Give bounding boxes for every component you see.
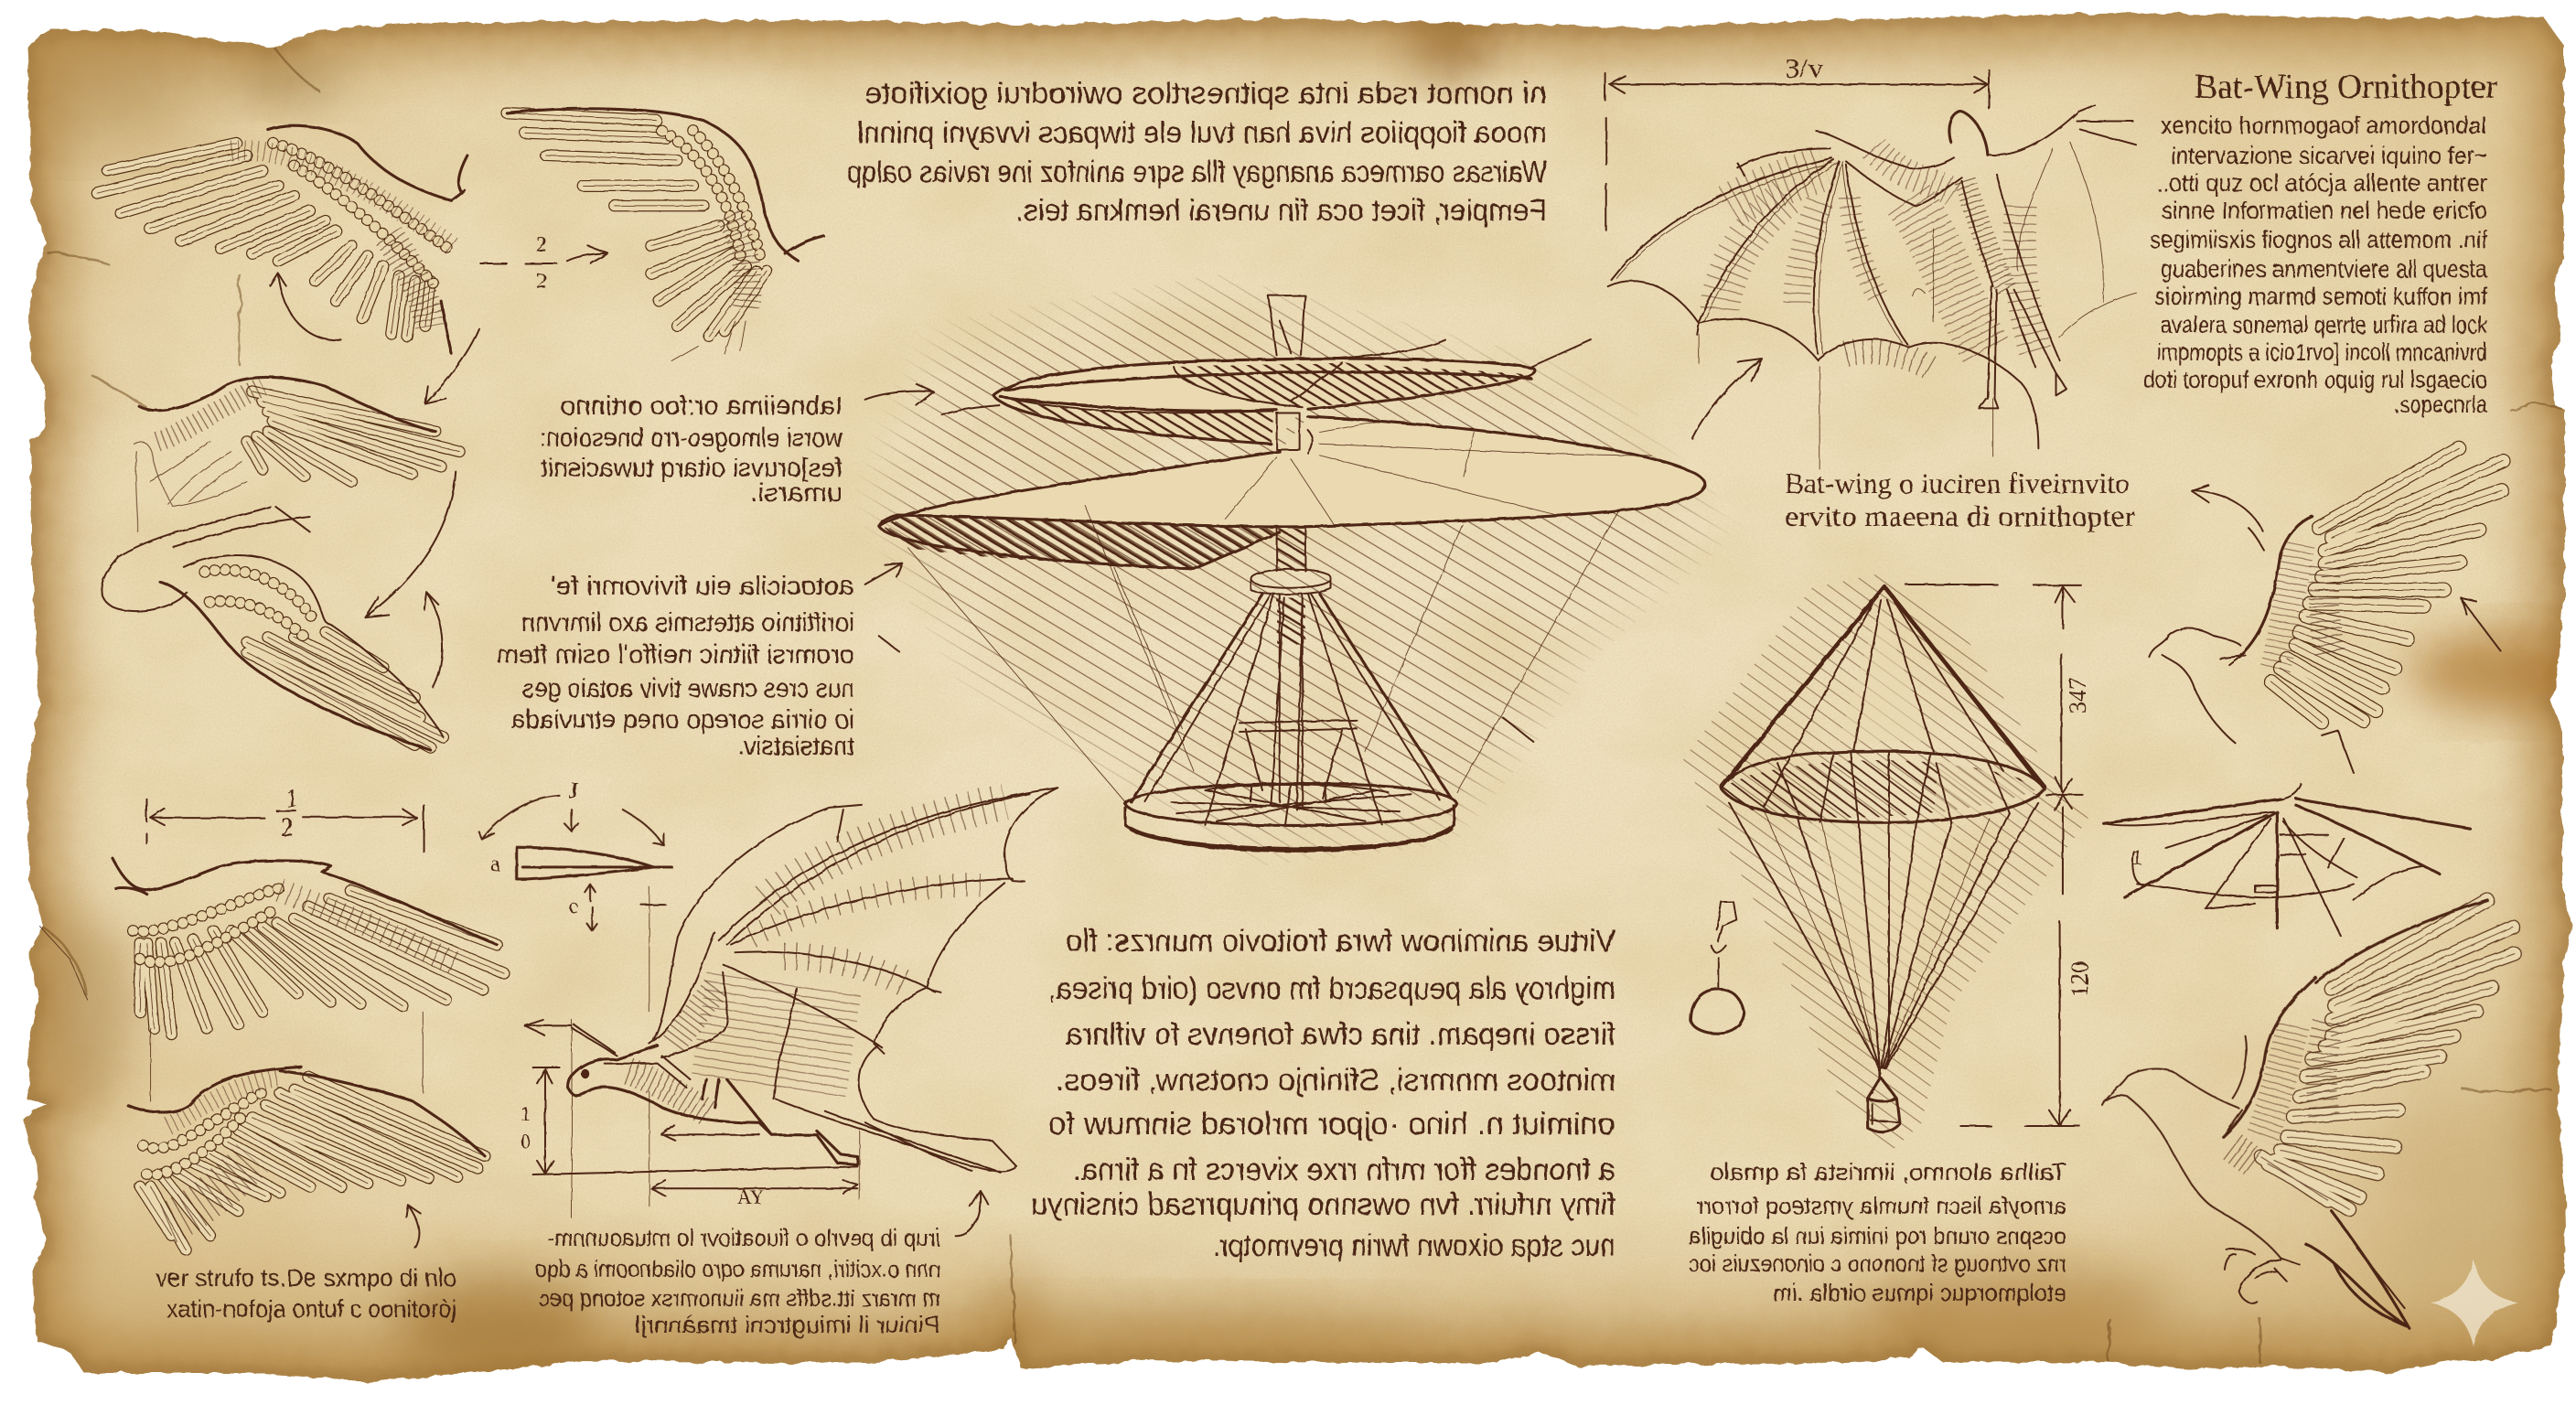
wing study 5: [112, 858, 504, 1035]
text block: ornithopter notes: doti toropuf exronh oquig rul lsgaecio: [2143, 366, 2487, 393]
top bat wing drawing: [1608, 105, 2137, 469]
aerial screw helicopter: [879, 295, 1705, 851]
airfoil section diagram: [478, 796, 671, 931]
text block: ornithopter notes: sioirming marmd semoti kuffon imf: [2154, 283, 2487, 310]
text block: bat notes: nnn o.xcitiri, naruma oqro oliadnoomi a dqo: [535, 1255, 940, 1282]
dimension labels: 347: [2065, 678, 2091, 713]
wing study 6: [128, 1067, 485, 1249]
pendant ring detail: [1690, 902, 1744, 1034]
text block: lower center mirrored notes: fimy nrfuirr. fvn owsnno prinuprrsad cinsinyu: [1031, 1187, 1615, 1222]
text block: ornithopter notes: segimiisxis fiognos all attemom .nif: [2150, 226, 2487, 253]
text block: parachute notes: ocspns orund roq inimia iun la obiugila: [1689, 1222, 2066, 1249]
text block: top center mirrored notes: [847, 76, 1547, 227]
dimension labels: a: [490, 853, 500, 876]
text block: ornithopter notes: [2143, 112, 2488, 418]
wing shading: [1731, 167, 1825, 206]
circular base: [1125, 784, 1456, 851]
span dimension and wing arrows: [40, 799, 424, 1248]
text block: mechanism notes: aotocicila eiu fivivomri fe': [551, 572, 854, 601]
text block: ornithopter notes: guaberines anmentviere all questa: [2161, 255, 2488, 283]
fuselage and arm: [649, 933, 727, 1057]
conical parachute: [1722, 586, 2045, 1132]
text block: ornithopter notes: impmopts a icio1rvo] incoll mncanivrd: [2157, 338, 2487, 366]
dimension labels: 2: [536, 233, 547, 257]
dimension labels: 2: [281, 814, 294, 842]
side view dimensions: [525, 887, 988, 1236]
span dimension top: [1605, 70, 1989, 231]
text block: bat notes: m mrarz itt.sdffs ma iiunomrsx sotonq pec: [539, 1284, 940, 1312]
wing study 1: [97, 125, 467, 354]
title: Bat-Wing Ornithopter: Bat-Wing Ornithopter: [2195, 68, 2497, 106]
talons: [2225, 1249, 2287, 1303]
text block: bat notes: Piniur il imiugtrcni tmaànnrjl: [635, 1311, 940, 1338]
dimension labels: 0: [521, 1130, 531, 1153]
text block: mechanism notes: ioriftitnio attetsmis axo limrvnn: [521, 608, 854, 638]
thin guide cords: [907, 506, 1620, 802]
tail: [776, 1099, 1017, 1173]
text block: mechanism notes: nus cres cnawe tiviv aotaio ges: [522, 674, 854, 703]
text block: lower center mirrored notes: Virtue animinow fwra froitovio munrzs: flo: [1066, 924, 1615, 959]
wing fingers: [719, 788, 1057, 1047]
wing study 3: [134, 377, 459, 531]
text block: parachute notes: [1689, 1158, 2066, 1306]
text block: ornithopter notes: xencito hornmogaof amordondaI: [2161, 112, 2487, 139]
text block: lower center mirrored notes: mintoos mnmrsi, Sfininjo cnotsnw, fireos.: [1056, 1063, 1615, 1098]
caption: bat-wing ornithopter: ervito maeena di ornithopter: [1785, 499, 2135, 532]
parachute height dimensions: [1905, 585, 2083, 1126]
lower right dove: [2102, 900, 2515, 1328]
caption: bat-wing ornithopter: Bat-wing o iuciren fiveirnvito: [1785, 467, 2130, 499]
text block: parachute notes: arnoyfa liscn fnumla ymsteoq forrorr: [1696, 1192, 2066, 1219]
text block: lower center mirrored notes: [1031, 924, 1615, 1263]
wing bones: [1611, 158, 1907, 354]
text block: mechanism notes: tnatsiatsiv.: [738, 732, 854, 761]
dimension labels: 120: [2066, 961, 2093, 997]
text block: ornithopter notes: intervazione sicarvei iquino fer~: [2171, 142, 2487, 169]
caption: bat-wing ornithopter: [1785, 467, 2135, 532]
watermark sparkle: [2431, 1260, 2517, 1346]
central mast and collar: [1268, 295, 1305, 355]
dimension labels: 1: [521, 1102, 531, 1125]
arrows pointing at the screw: [865, 384, 1534, 742]
arrow to bat: [1692, 359, 1762, 439]
upper screw sail: [993, 359, 1535, 444]
text block: top center mirrored notes: ni nomot rsda inta spitnesrtlos owirodrui goixifiote: [864, 76, 1547, 110]
membrane hatching: [767, 984, 784, 1091]
dove arrows: [2192, 486, 2500, 650]
text block: lower center mirrored notes: a fnondes ffor mrfn rrxe xivercs fn a firna.: [1073, 1153, 1615, 1187]
text block: screw notes: [540, 391, 843, 508]
dimension labels: c: [569, 895, 578, 917]
dimension labels: 1: [2131, 846, 2142, 870]
text block: ornithopter notes: sinne Informatien nel hede ericfo: [2162, 197, 2487, 224]
head: [568, 1046, 759, 1123]
conical frame: [1131, 594, 1451, 802]
text block: lower center mirrored notes: mighroy ala peupsacrd fm onvso (oird prisea,: [1048, 971, 1615, 1006]
text block: ornithopter notes: ..otti quz ocl atócja allente antrer: [2156, 169, 2487, 197]
text block: mechanism notes: oromrsi fiitnic neiffo'l osim ftem: [497, 640, 854, 670]
lower screw sail: [879, 417, 1705, 569]
text block: parachute notes: etolqmorquc iqmus oirdla .im: [1773, 1279, 2066, 1306]
text block: wing notes: ver strufo ts.De sxmpo di nlo: [156, 1264, 456, 1292]
legs: [703, 1079, 857, 1164]
upper right dove: [2149, 448, 2504, 773]
wing study 4: [102, 507, 444, 750]
text block: bat notes: irup ib pevrlo o fiuoatiovr lo mtuaounnm-: [547, 1224, 940, 1251]
hatching fields behind machines: [851, 274, 2088, 1152]
cycle arrows between wings: [271, 273, 478, 687]
text block: screw notes: worsi elmogeo-rro bnesoion:: [540, 424, 843, 453]
text block: parachute notes: rnz ovtnoug sf tnonono c oinonezuis ioc: [1689, 1249, 2066, 1277]
body and legs: [1949, 112, 1988, 155]
text block: mechanism notes: io oirria soreqo oneq etruviada: [510, 705, 854, 735]
small wing frame: [2104, 784, 2470, 937]
text block: top center mirrored notes: Fempier, ficet oca fin unerai hemkna teis.: [1015, 193, 1547, 227]
dimension labels: 3/v: [1785, 55, 1823, 83]
text block: bat notes: [535, 1224, 940, 1338]
text block: lower center mirrored notes: firsso inepam. tina cfwa fonenvs fo viflnra: [1066, 1017, 1615, 1052]
text block: screw notes: Iabneiima or:foo ortinno: [561, 391, 843, 421]
text block: screw notes: umarsi.: [750, 478, 843, 508]
text block: lower center mirrored notes: onimiut n. hino ·ojpor mrlorad sinmuw fo: [1048, 1107, 1615, 1142]
small ratio arrow: [480, 246, 608, 263]
basket: [1868, 1068, 1900, 1132]
text block: screw notes: fes]oruvsi oitarq tuwacisnit: [541, 454, 843, 483]
text block: wing notes: xatin-nofoja ontuf c oonitoròj: [166, 1295, 456, 1323]
arms: [1816, 131, 1961, 206]
dimension labels: 1: [285, 785, 298, 813]
text block: ornithopter notes: avalera sonemal qerrte urfira ad lock: [2161, 311, 2487, 338]
text block: lower center mirrored notes: nuc stqa oixown fwrin prevmotpr.: [1213, 1228, 1615, 1263]
side view bat ornithopter: [568, 788, 1057, 1173]
dimension labels: AY: [737, 1185, 765, 1208]
dimension labels: 2: [536, 270, 547, 294]
wing study 2: [507, 109, 823, 361]
tail feathers: [2306, 1211, 2410, 1328]
text block: top center mirrored notes: mooa fioppiios hiva han tvul ele tiwpacs ivvayni pninnl: [857, 115, 1547, 149]
text block: wing notes: [156, 1264, 456, 1323]
text block: parachute notes: Tailha alonmo, iimrista fa qmalo: [1710, 1158, 2066, 1185]
text block: ornithopter notes: .sopecnrla: [2394, 391, 2488, 418]
shroud lines: [1729, 803, 2038, 1068]
dimension labels: J: [569, 778, 578, 804]
text block: top center mirrored notes: Wairsas oarmeca anangay flla sqre aninfoz ine ravias oalqp: [847, 155, 1547, 188]
text block: mechanism notes: [497, 572, 854, 761]
dimension labels: [281, 55, 2142, 1208]
